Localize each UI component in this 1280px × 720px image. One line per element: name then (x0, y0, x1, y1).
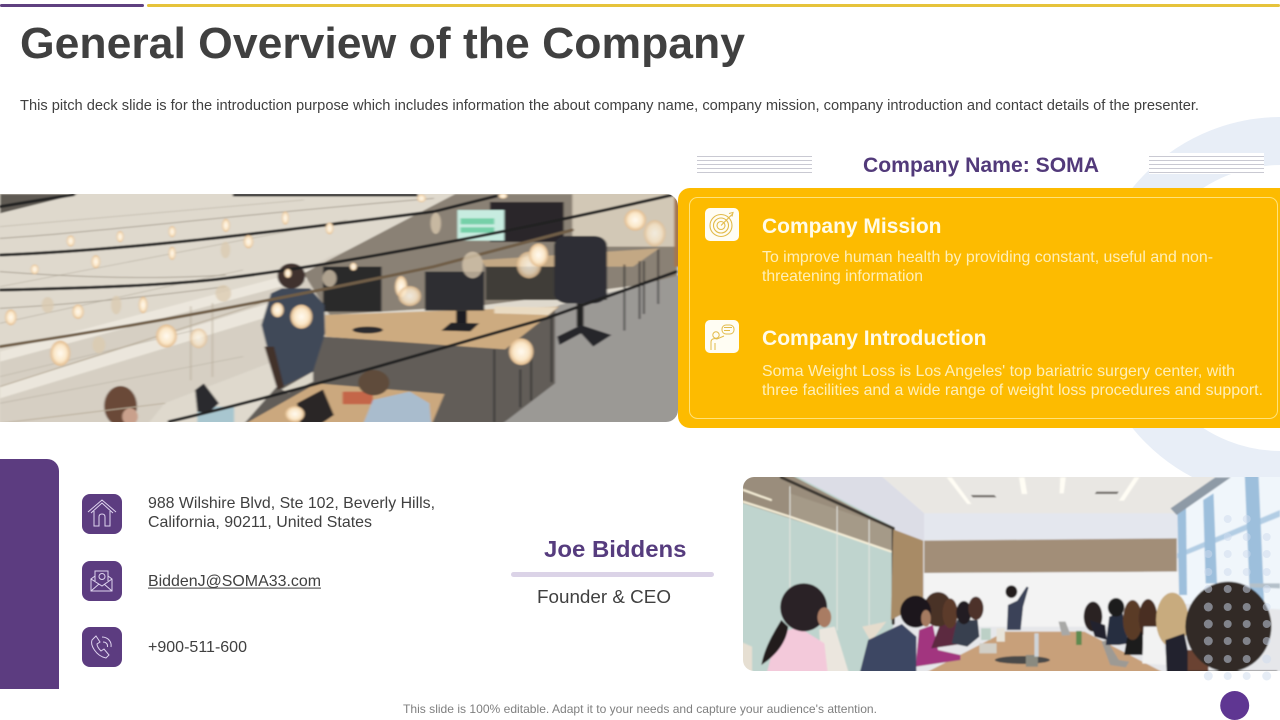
seated man (358, 370, 432, 422)
standing man (261, 263, 325, 393)
icon: house (82, 494, 122, 534)
top accent bars (0, 4, 1280, 7)
black desktop monitor (425, 272, 484, 331)
text: introduction statement: three facilities and a wide range of weight loss procedures and support. (762, 382, 1263, 399)
table items (979, 622, 1129, 667)
text: street address (148, 495, 435, 531)
left stripe decoration (697, 156, 812, 172)
presenter role: Founder & CEO (537, 586, 671, 607)
presenter name: Joe Biddens (544, 536, 686, 562)
ceiling lights (947, 477, 1140, 504)
ceiling vents (971, 492, 1119, 497)
contact: address (82, 494, 435, 534)
heading: company introduction: Company Introduction (762, 326, 986, 350)
icon: speaker with speech bubble (705, 320, 739, 353)
background ring (1114, 141, 1280, 475)
icon: envelope (82, 561, 122, 601)
icon: target (705, 208, 739, 241)
windows (1170, 470, 1280, 610)
icon: phone (82, 627, 122, 667)
right stripe decoration (1149, 153, 1264, 174)
subtitle description: This pitch deck slide is for the introduction purpose which includes information the about company name, company mission, company introduction and contact details of the presenter. (20, 98, 1199, 114)
seated people right side (1082, 580, 1278, 671)
text: street address: California, 90211, United States (148, 514, 372, 531)
text: street address: 988 Wilshire Blvd, Ste 102, Beverly Hills, (148, 495, 435, 512)
left purple bar (0, 459, 59, 689)
decorative dot grid (1204, 515, 1271, 680)
conference table (928, 630, 1162, 671)
presenter divider (511, 572, 714, 577)
footer note: This slide is 100% editable. Adapt it to your needs and capture your audience's attention. (403, 702, 877, 716)
string light wires (0, 195, 676, 422)
panel: company mission and introduction (678, 188, 1280, 428)
text: mission statement (762, 249, 1213, 285)
photo: team in conference room (743, 477, 1280, 671)
page marker circle (1220, 691, 1249, 720)
seated woman (104, 386, 138, 426)
green spreadsheet monitor (457, 210, 504, 241)
company name heading: Company Name: SOMA (863, 153, 1099, 177)
seated people left side (743, 582, 984, 671)
text: introduction statement: Soma Weight Loss is Los Angeles' top bariatric surgery center, with (762, 363, 1235, 380)
laptop (296, 389, 335, 422)
title: General Overview of the Company (20, 19, 746, 68)
office chair (554, 236, 611, 347)
text: mission statement: threatening information (762, 268, 923, 285)
heading: company mission: Company Mission (762, 214, 942, 238)
photo: open-plan office with string lights (0, 194, 678, 422)
text: mission statement: To improve human health by providing constant, useful and non- (762, 249, 1213, 266)
contact: email (82, 561, 321, 601)
text: phone number: +900-511-600 (148, 639, 247, 656)
presenter at whiteboard (1006, 585, 1029, 630)
text: email address: BiddenJ@SOMA33.com (148, 573, 321, 590)
text: introduction statement (762, 363, 1263, 399)
contact: phone (82, 627, 247, 667)
light bulbs (5, 193, 666, 422)
